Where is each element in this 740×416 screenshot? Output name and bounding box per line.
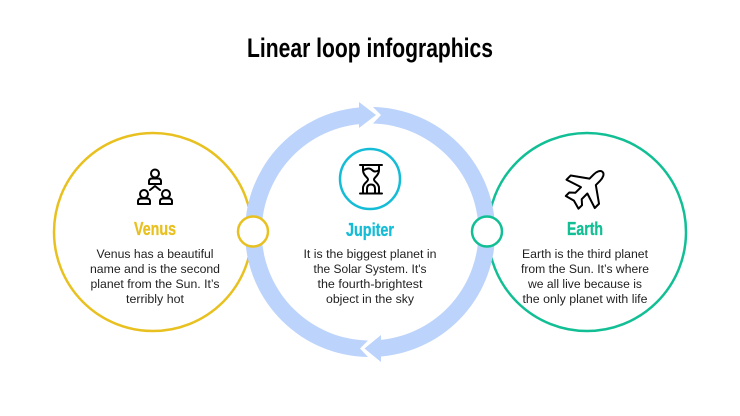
loop arrow: right arc (364, 107, 495, 362)
panel: Venus (90, 170, 220, 306)
text: Earth description: from the Sun. It’s where (521, 262, 649, 276)
text: Venus description: planet from the Sun. It’s (90, 277, 220, 291)
text: Venus description: name and is the second (90, 262, 220, 276)
text: Venus description: terribly hot (126, 292, 185, 306)
text: Earth description: the only planet with life (522, 292, 648, 306)
text: Earth description (521, 247, 649, 306)
text: Jupiter description (304, 247, 437, 306)
text: Jupiter description: the Solar System. It's (314, 262, 426, 276)
text: Venus description: Venus has a beautiful (96, 247, 214, 261)
text: Jupiter description: the fourth-brightest (318, 277, 423, 291)
text: Earth description: Earth is the third planet (522, 247, 649, 261)
connector: green node (472, 216, 502, 246)
panel: Venus circle (54, 133, 252, 331)
icon: airplane (558, 158, 617, 216)
connector: yellow node (238, 216, 268, 246)
heading: Jupiter: Jupiter (346, 219, 394, 240)
heading: Earth: Earth (567, 218, 603, 239)
text: Venus description (90, 247, 220, 306)
icon: people network (138, 170, 172, 204)
title: Linear loop infographics (247, 33, 493, 63)
heading: Venus: Venus (134, 218, 176, 239)
icon: hourglass badge (340, 149, 400, 209)
text: Jupiter description: object in the sky (326, 292, 415, 306)
text: Earth description: we all live because is (527, 277, 642, 291)
panel: Earth circle (488, 133, 686, 331)
panel: Jupiter (304, 149, 437, 306)
loop arrow: left arc (245, 102, 376, 357)
panel: Earth (521, 158, 649, 306)
text: Jupiter description: It is the biggest planet in (304, 247, 437, 261)
